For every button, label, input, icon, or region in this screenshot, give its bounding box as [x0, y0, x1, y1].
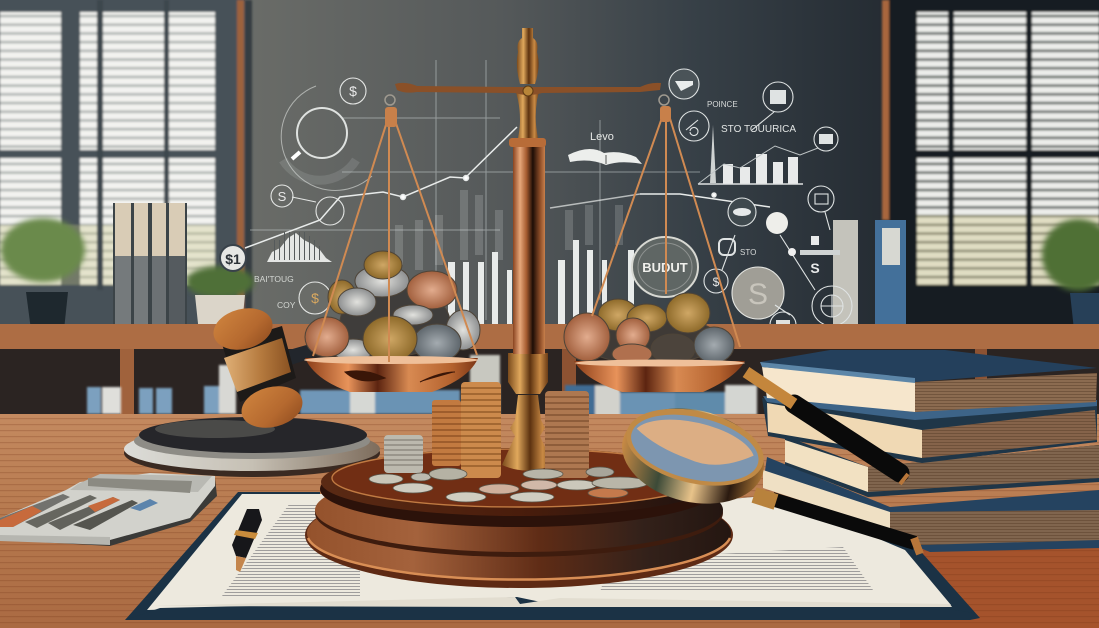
lower magnifier — [612, 395, 920, 554]
right network icons: S — [810, 260, 820, 276]
wall label: BAI'TOUG: BAI'TOUG — [254, 274, 294, 284]
left pan ropes — [313, 95, 477, 362]
scale column — [502, 28, 553, 470]
left network icons: $1 — [225, 251, 241, 267]
rising bar chart top right — [698, 125, 818, 184]
calculator — [0, 473, 217, 546]
left network icons — [220, 78, 366, 314]
wall label: COY: COY — [277, 300, 296, 310]
chalkboard chart grid — [250, 60, 700, 320]
left pan — [304, 356, 478, 392]
wooden base — [305, 448, 733, 588]
gavel sound block — [124, 417, 380, 477]
right window with blinds — [882, 0, 1099, 330]
bar chart behind scale — [395, 190, 634, 328]
upper magnifier handle — [746, 372, 908, 484]
document under scale — [125, 492, 980, 620]
binders on shelf, left — [113, 203, 187, 330]
stacked books — [760, 350, 1099, 552]
icon: open book — [568, 149, 642, 165]
left network icons: S — [278, 189, 287, 204]
gavel — [209, 302, 312, 434]
right coin pile — [564, 293, 734, 364]
wall label: STO TOUURICA: STO TOUURICA — [721, 124, 796, 135]
right pan — [574, 360, 745, 392]
books in lower shelf — [87, 355, 757, 430]
BUDUT badge: BUDUT — [642, 260, 688, 275]
trend line chart — [245, 127, 770, 248]
shelf — [0, 324, 1099, 415]
BUDUT badge — [632, 237, 698, 297]
left window with blinds — [0, 0, 252, 330]
right network icons — [669, 69, 852, 338]
wall label: STO: STO — [740, 248, 756, 257]
big magnifier icon on wall — [281, 86, 372, 190]
right network icons: $ — [713, 275, 720, 289]
wall background — [245, 0, 885, 330]
binders on shelf, right — [833, 220, 906, 332]
potted plants — [1, 218, 1099, 333]
right pan ropes — [592, 95, 740, 347]
third coin stack in front of column — [545, 391, 589, 478]
left network icons: $ — [349, 83, 357, 99]
small histogram — [267, 232, 332, 262]
wall label: POINCE: POINCE — [707, 100, 738, 109]
scattered coins on the base — [369, 467, 648, 502]
left network icons: $ — [311, 290, 319, 306]
table — [0, 414, 1099, 628]
right network icons: S — [748, 278, 768, 311]
scale beam — [395, 83, 661, 96]
pen — [232, 509, 262, 572]
left coin pile — [305, 251, 480, 362]
coin stacks on the base — [384, 382, 501, 478]
wall label: Levo: Levo — [590, 131, 614, 143]
